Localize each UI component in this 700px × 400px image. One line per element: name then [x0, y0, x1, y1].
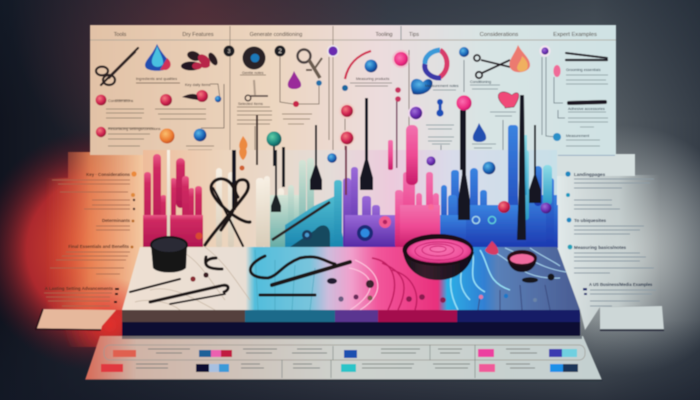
text block labels: Gentle notes: [242, 71, 264, 75]
icon: pink cone on surface: [485, 241, 498, 255]
right document labels: [574, 172, 653, 287]
bars: pink group: [388, 125, 440, 248]
label: tooling note: Measuring products: [356, 77, 389, 81]
right document labels: Measuring basics/notes: [574, 245, 627, 250]
left document text lines: [44, 180, 130, 306]
icon: target button: [242, 46, 266, 70]
platform: top surface: [122, 247, 580, 310]
bars: cream group: [167, 150, 284, 248]
text block lines: right: [426, 75, 608, 148]
legend text lines: [136, 349, 537, 368]
header labels: Tools: [114, 32, 127, 38]
connector lines right: [441, 57, 565, 185]
markers: numbered dots: [224, 45, 339, 57]
header labels: Considerations: [480, 32, 518, 38]
text block labels: Considerations: [108, 99, 133, 103]
left document markers: [114, 171, 137, 303]
text block labels: Selected items: [238, 102, 263, 106]
text block labels right: Measurement: [566, 134, 590, 138]
text block lines: left: [106, 75, 312, 155]
icon: purple drop: [288, 71, 301, 89]
right document labels: A US Business/Media Examples: [589, 282, 653, 287]
panel: right document: [556, 154, 664, 330]
chart: colour bars wall: [96, 45, 561, 248]
bobbin icons: [436, 65, 561, 117]
panel: left document: [36, 152, 160, 347]
markers: numbered dots: 2: [278, 48, 282, 55]
bullet dots and badges: [96, 45, 561, 174]
icon: blue button: [365, 60, 377, 72]
label: heart note: Measurement notes: [425, 84, 459, 88]
tall dark brushes: [232, 95, 541, 240]
icon: peach drop: [509, 45, 530, 72]
connector lines: [201, 50, 409, 180]
text block labels: Key daily items: [185, 83, 211, 87]
icon: capsules: [181, 49, 220, 70]
bowl: small: [507, 250, 537, 272]
right document labels: Landingpages: [574, 172, 606, 177]
bars: crimson group: [143, 154, 203, 248]
bars: purple group: [343, 167, 400, 248]
markers: numbered dots: 3: [227, 49, 231, 55]
small dots: [293, 80, 322, 107]
icon: blue heart: [411, 79, 433, 95]
text block labels right: Grooming essentials: [566, 68, 601, 72]
text block labels: Ingredients and qualities: [136, 77, 177, 81]
panel: top reference board: [90, 25, 616, 185]
icon: blue drop: [473, 123, 486, 142]
header labels: Tooling: [375, 32, 393, 38]
text block labels right: Conditioning: [470, 80, 491, 84]
icon: tweezers: [566, 53, 607, 103]
legend swatches: [101, 349, 578, 372]
platform: front face: [122, 310, 580, 336]
flowing contour lines: [135, 247, 566, 310]
bowl: pink mixture: [402, 234, 474, 280]
scissors small: [245, 80, 268, 101]
icon: donut ring: [425, 50, 447, 78]
left document labels: [45, 172, 131, 291]
right document markers: [565, 171, 587, 295]
small tools on surface: [130, 256, 350, 304]
lower left sheet: [36, 309, 116, 330]
right document labels: To ubiquesites: [574, 218, 607, 223]
left document labels: Key · Considerations: [86, 172, 131, 177]
diagonal brush: [272, 202, 330, 247]
left document labels: Final Essentials and Benefits: [68, 244, 130, 249]
text block labels right: Adhesive accessories: [568, 107, 605, 111]
label: tooling note: [342, 77, 392, 91]
label: heart note: [425, 84, 459, 90]
header labels: Expert Examples: [553, 32, 597, 38]
header labels: Generate conditioning: [250, 32, 302, 38]
left document labels: A Lasting Setting Advancements: [45, 286, 114, 291]
icon: pink heart: [498, 92, 519, 108]
ring buttons: [196, 201, 551, 241]
cup: [151, 237, 187, 272]
icon: magnifier tool: [298, 50, 322, 78]
header labels: Dry Features: [182, 32, 214, 38]
arc arrow: [345, 51, 371, 79]
icon: scissors blue: [474, 55, 510, 78]
bars: sage and teal group: [270, 158, 314, 248]
large scissors: [205, 179, 250, 246]
text block labels: [108, 71, 264, 131]
left document labels: Determinants: [102, 218, 131, 223]
text block labels: Resurfacing settings/conditions: [108, 127, 161, 131]
text block labels right: [470, 68, 605, 138]
icon: scissors: [96, 48, 138, 85]
legend panel: [85, 336, 602, 380]
studs: [190, 272, 554, 303]
icon: water drop: [145, 44, 171, 71]
header labels: Tips: [409, 32, 419, 38]
right document text lines: [574, 179, 656, 306]
bars: blue group: [440, 125, 558, 248]
bar stems: [345, 98, 398, 195]
header labels: [114, 32, 597, 38]
